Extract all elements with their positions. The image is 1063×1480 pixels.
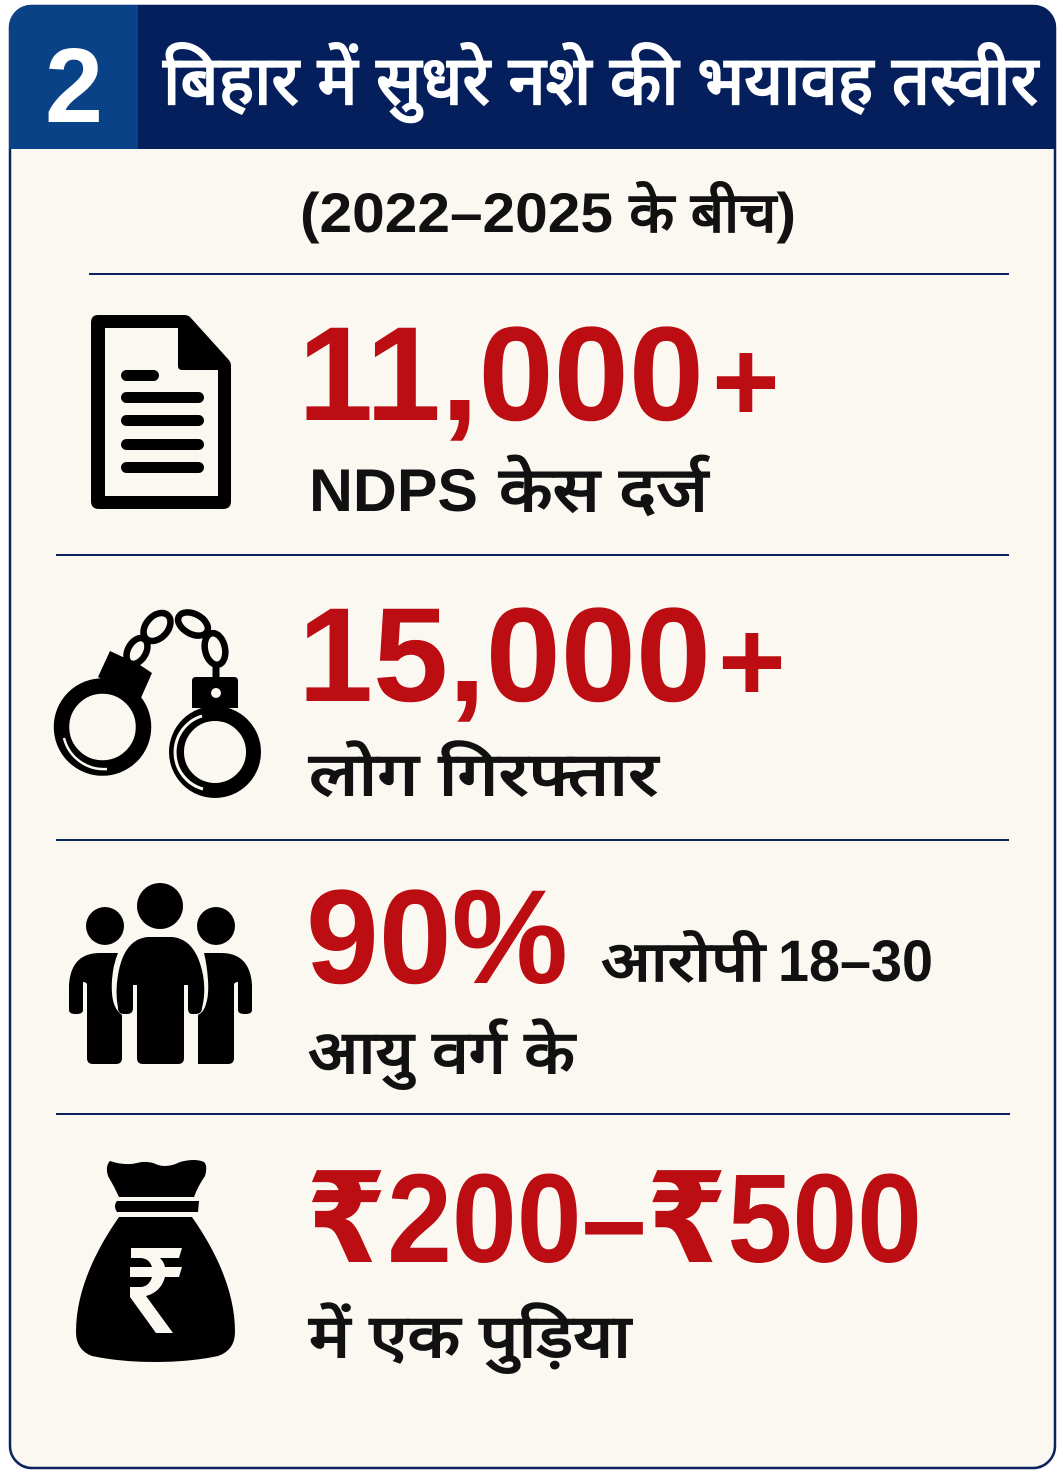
- header band: [9, 5, 1056, 149]
- stat: 11,000+: +: [712, 316, 780, 446]
- label: people arrested: लोग गिरफ्तार: [308, 740, 661, 808]
- section number: 2: [45, 27, 103, 145]
- label: NDPS cases: [309, 454, 710, 525]
- title: बिहार में सुधरे नशे की भयावह तस्वीर: [161, 42, 1040, 124]
- stat: 15,000+: +: [718, 596, 786, 726]
- label: accused aged 18-30: [601, 929, 933, 994]
- icon glyph: rupee: [130, 1248, 182, 1333]
- icon: document: [91, 315, 231, 509]
- label: age group: आयु वर्ग के: [308, 1018, 577, 1091]
- icon: handcuffs: [62, 608, 254, 790]
- label: NDPS cases: NDPS: [309, 457, 478, 524]
- stat: 90%: 90%: [306, 863, 568, 1012]
- icon: people group: [69, 883, 252, 1064]
- label: accused aged 18-30: 18–30: [778, 929, 933, 994]
- stat: 11,000+: 11,000: [298, 300, 704, 449]
- label: NDPS cases: केस दर्ज: [498, 454, 710, 525]
- stat: 15,000+: 15,000: [298, 581, 711, 730]
- icon: money bag with rupee: [76, 1160, 235, 1362]
- label: accused aged 18-30: आरोपी: [601, 929, 768, 993]
- stat: price range: ₹200–₹500: [306, 1148, 922, 1289]
- subtitle: period: (2022–2025 के बीच): [300, 180, 796, 244]
- label: per packet: में एक पुड़िया: [308, 1302, 634, 1375]
